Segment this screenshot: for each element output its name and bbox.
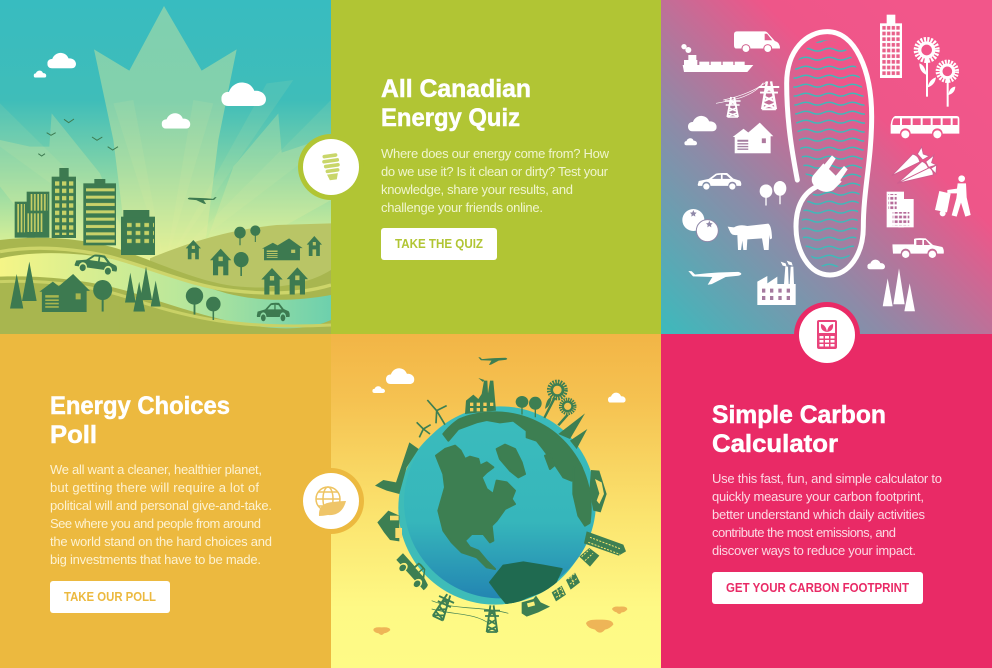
icon: sunflowers xyxy=(916,40,957,107)
heading: Energy Quiz xyxy=(381,104,520,132)
icon: carrots xyxy=(892,147,937,183)
body text: big investments that have to be made. xyxy=(50,552,261,567)
icon: solar panels xyxy=(552,531,626,601)
button: get your carbon footprint xyxy=(712,572,923,604)
icon: houses xyxy=(377,511,402,541)
icon: car xyxy=(393,549,435,593)
body text: We all want a cleaner, healthier planet, xyxy=(50,462,262,477)
icon: factory xyxy=(757,261,796,305)
panel: carbon footprint illustration xyxy=(661,0,992,334)
clouds xyxy=(372,368,626,403)
icon: plane xyxy=(478,357,507,365)
icon: bus xyxy=(891,116,959,138)
icon: globe and leaf badge xyxy=(298,468,364,534)
icon: person with bin xyxy=(935,175,971,217)
icon: pine trees xyxy=(883,268,915,311)
body text: the world stand on the hard choices and xyxy=(50,534,272,549)
icon: pickup truck xyxy=(892,238,944,258)
icon: sunflowers xyxy=(543,382,575,426)
icon: apartment tower xyxy=(880,15,902,78)
icon: cargo ship xyxy=(681,44,753,72)
icon: power lines xyxy=(716,81,779,117)
icon: truck on right xyxy=(589,470,607,512)
body text: discover ways to reduce your impact. xyxy=(712,543,916,558)
icon: blueberries xyxy=(682,209,718,242)
heading: Energy Choices xyxy=(50,392,230,420)
icon: light bulb badge xyxy=(298,134,364,200)
icon: trees xyxy=(760,181,786,206)
panel: Energy Choices Poll xyxy=(0,334,331,668)
heading: Poll xyxy=(50,421,97,449)
icon: cow xyxy=(728,224,772,250)
icon: factory xyxy=(465,378,496,414)
continent: Arctic and Eurasia xyxy=(443,409,583,481)
body text: Where does our energy come from? How xyxy=(381,146,610,161)
body text: See where you and people from around xyxy=(50,516,261,531)
icon: calculator badge xyxy=(794,302,860,368)
city buildings xyxy=(15,168,155,255)
panel: Simple Carbon Calculator xyxy=(661,334,992,668)
hills and road xyxy=(0,223,331,334)
button: get your carbon footprint: GET YOUR CARBON FOOTPRINT xyxy=(726,581,909,595)
button: take our poll: TAKE OUR POLL xyxy=(64,590,156,604)
orange clouds xyxy=(373,607,627,635)
icon: trees xyxy=(516,396,542,417)
body text: contribute the most emissions, and xyxy=(712,525,896,540)
houses and trees xyxy=(10,225,322,321)
footprint sole with waves xyxy=(787,32,872,275)
body text: challenge your friends online. xyxy=(381,200,543,215)
heading: All Canadian xyxy=(381,75,531,103)
continent: North America xyxy=(436,446,515,569)
icon: delivery van xyxy=(734,31,780,52)
body text: quickly measure your carbon footprint, xyxy=(712,489,924,504)
icon: house xyxy=(733,123,773,153)
panel: Canadian landscape illustration xyxy=(0,0,331,334)
heading: Calculator xyxy=(712,430,838,458)
body text: better understand which daily activities xyxy=(712,507,926,522)
button: take our poll xyxy=(50,581,170,613)
icon: sedan xyxy=(698,173,741,190)
city silhouette xyxy=(375,442,419,494)
heading: Simple Carbon xyxy=(712,401,886,429)
icon: wind turbines xyxy=(417,400,447,437)
icon: plug xyxy=(812,155,848,192)
clouds xyxy=(684,116,885,269)
button: take the quiz xyxy=(381,228,497,260)
clouds xyxy=(34,53,266,129)
body text: political will and personal give-and-take. xyxy=(50,498,272,513)
icon: office block xyxy=(887,192,914,227)
icon: tractor xyxy=(522,596,550,617)
globe xyxy=(398,406,597,606)
continent: Greenland xyxy=(497,445,525,477)
body text: knowledge, share your results, and xyxy=(381,182,573,197)
icon: plane xyxy=(688,271,741,285)
panel: globe illustration xyxy=(331,334,661,668)
panel: All Canadian Energy Quiz xyxy=(331,0,661,334)
icon: power lines xyxy=(430,591,508,632)
body text: do we use it? Is it clean or dirty? Test your xyxy=(381,164,609,179)
button: take the quiz: TAKE THE QUIZ xyxy=(395,237,483,251)
body text: Use this fast, fun, and simple calculator to xyxy=(712,471,942,486)
body text: but getting there will require a lot of xyxy=(50,480,259,495)
icon: pine trees xyxy=(558,413,587,449)
birds xyxy=(38,119,118,156)
icon: plane xyxy=(188,197,217,204)
maple leaf rays xyxy=(0,6,331,334)
